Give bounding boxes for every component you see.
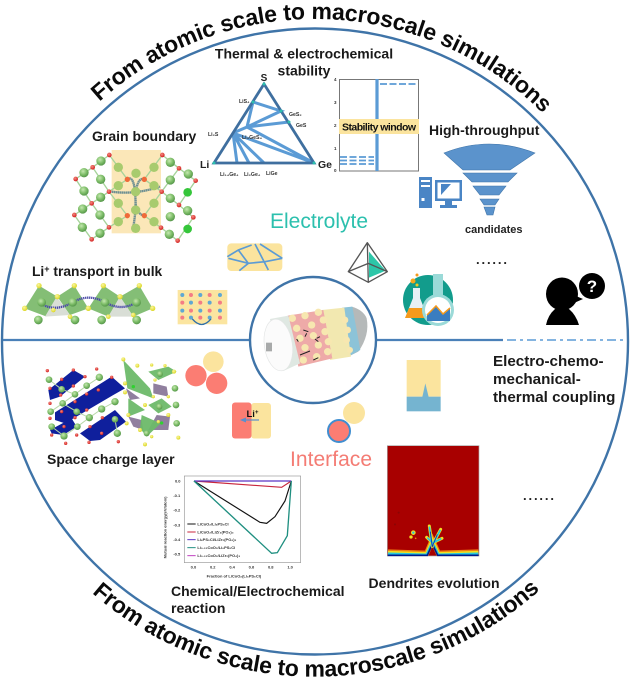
ternary phase diagram: Li₄GeS₄ <box>242 135 262 141</box>
heading: chemical electrochemical reaction: Chemical/Electrochemical <box>171 583 345 599</box>
heading: high-throughput: High-throughput <box>429 122 540 138</box>
title: top arc text: From atomic scale to macroscale simulations <box>90 5 549 112</box>
chart: reaction energy: -0.5 <box>173 552 181 557</box>
ternary phase diagram: LiGe <box>266 171 278 177</box>
heading: thermal and electrochemical stability: Thermal & electrochemical <box>215 46 393 62</box>
stability window chart: 0 <box>334 168 337 173</box>
icon: yellow particle <box>343 402 365 424</box>
chart: reaction energy: LiCoO₂/LiZr₂(PO₄)₃ <box>197 529 234 534</box>
ternary phase diagram: S <box>261 73 268 84</box>
stability window chart: Stability window <box>342 122 417 134</box>
heading: thermal and electrochemical stability: stability <box>278 62 331 78</box>
stability window chart <box>334 77 419 173</box>
ternary phase diagram: Li₂S <box>208 132 219 138</box>
text: coupling: mechanical- <box>493 371 581 388</box>
heading: Li+ transport in bulk: Li <box>32 264 44 279</box>
icon: Li+ interface transfer <box>232 402 271 438</box>
icon: dendrite schematic <box>407 360 441 411</box>
icon: coated red particle <box>328 420 350 442</box>
heading: Li+ transport in bulk: transport in bulk <box>50 264 163 279</box>
icon: screening funnel <box>444 144 535 215</box>
chart: reaction energy: 0.2 <box>210 564 216 569</box>
ternary phase diagram: Li <box>200 159 209 171</box>
chart: reaction energy: Fraction of LiCoO₂(Li₆PS₅Cl) <box>207 573 262 578</box>
ternary phase diagram <box>200 73 332 178</box>
icon: flasks and chart <box>403 274 454 326</box>
text: candidates: candidates <box>465 224 522 236</box>
ternary phase diagram: GeS₂ <box>289 112 302 118</box>
ternary phase diagram: Li₁₄Ge₄ <box>220 172 239 178</box>
chart: reaction energy: 0.6 <box>249 564 255 569</box>
ternary phase diagram: Ge <box>318 159 332 171</box>
icon: Li+ interface transfer: + <box>255 410 259 416</box>
chart: reaction energy: LiCoO₂/Li₆PS₅Cl <box>197 521 229 526</box>
chart: reaction energy: Li₀.₃₃CoO₂/LiZr₂(PO₄)₃ <box>197 553 240 558</box>
heading: space charge layer: Space charge layer <box>47 451 175 467</box>
chart: reaction energy: Li₆PS₅Cl/LiZr₂(PO₄)₃ <box>197 537 237 542</box>
icon: computer <box>419 177 462 208</box>
ternary phase diagram: GeS <box>296 123 307 129</box>
icon: person with question <box>546 273 605 325</box>
chart: reaction energy: -0.4 <box>173 537 181 542</box>
battery cell <box>261 307 367 373</box>
chart: reaction energy: 0.4 <box>229 564 236 569</box>
space charge crystal structure <box>46 357 180 446</box>
Li+ bulk transport crystal structure <box>22 283 155 324</box>
text: coupling: thermal coupling <box>493 389 615 406</box>
chart: reaction energy: 0.0 <box>175 478 181 483</box>
grain boundary crystal structure <box>72 150 198 243</box>
chart: reaction energy: Li₀.₃₃CoO₂/Li₆PS₅Cl <box>197 545 235 550</box>
heading: chemical electrochemical reaction: reaction <box>171 600 225 616</box>
icon: Li+ interface transfer: Li <box>246 409 255 420</box>
stability window chart: 2 <box>334 123 337 128</box>
heading: Li+ transport in bulk: + <box>44 264 50 274</box>
chart: reaction energy: 0.0 <box>191 564 197 569</box>
chart: reaction energy: -0.1 <box>173 493 181 498</box>
ternary phase diagram: LiS₄ <box>239 99 250 105</box>
text: ellipsis lower: ...... <box>523 488 554 503</box>
heading: dendrites evolution: Dendrites evolution <box>368 575 500 591</box>
chart: reaction energy <box>163 476 301 578</box>
stability window chart: 4 <box>334 77 337 82</box>
text: coupling: Electro-chemo- <box>493 353 604 370</box>
icon: person with question: ? <box>587 277 597 296</box>
stability window chart: 1 <box>334 146 337 151</box>
chart: reaction energy: -0.3 <box>173 522 181 527</box>
heading: electrolyte: Electrolyte <box>270 210 368 233</box>
icon: lattice diffusion schematic <box>178 290 227 324</box>
heading: interface: Interface <box>290 448 372 471</box>
stability window chart: 3 <box>334 100 337 105</box>
ternary phase diagram: Li₂Ge₄ <box>244 172 261 178</box>
center circle with battery <box>250 277 376 403</box>
icon: particle cluster <box>185 351 227 394</box>
chart: reaction energy: 1.0 <box>287 564 294 569</box>
chart: reaction energy: 0.8 <box>268 564 274 569</box>
chart: reaction energy: Mutual reaction energy(eV/atom) <box>163 496 168 558</box>
dendrite heat map <box>387 446 479 556</box>
icon: pyramid structure <box>348 243 387 282</box>
chart: reaction energy: -0.2 <box>173 508 181 513</box>
title: bottom arc text: From atomic scale to macroscale simulations <box>93 582 538 677</box>
heading: grain boundary: Grain boundary <box>92 128 196 144</box>
icon: grain network <box>227 243 282 271</box>
text: ellipsis upper: ...... <box>476 252 507 267</box>
divider line <box>3 339 625 341</box>
